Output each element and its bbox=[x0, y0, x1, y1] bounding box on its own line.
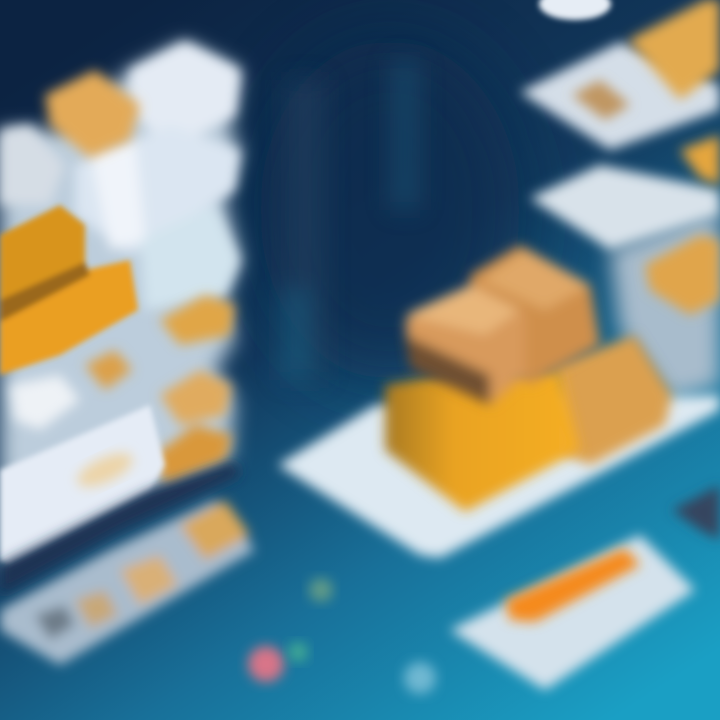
top orange box bbox=[45, 70, 140, 158]
second shelf bbox=[530, 165, 720, 250]
shelf backing bbox=[0, 42, 240, 565]
top white oval bbox=[539, 0, 611, 20]
middle shelf items bbox=[10, 295, 235, 485]
right upper shelves bbox=[520, 0, 720, 315]
left shelf stack bbox=[0, 42, 255, 665]
third orange box bbox=[645, 235, 720, 315]
card base bbox=[450, 535, 695, 690]
dark glow behind center bbox=[260, 40, 520, 380]
white card with orange button bbox=[450, 535, 695, 690]
large white panel bbox=[0, 405, 165, 565]
upper white shelf boxes bbox=[0, 42, 240, 310]
bottom shelf tray bbox=[0, 500, 255, 665]
orange button bbox=[505, 548, 640, 622]
central dark data columns bbox=[280, 60, 420, 380]
top large orange box bbox=[628, 0, 720, 100]
pink dot bbox=[248, 646, 284, 682]
upper tan boxes bbox=[405, 245, 600, 405]
colored dots bbox=[248, 578, 436, 694]
lower yellow box bbox=[385, 370, 580, 512]
central box pile bbox=[385, 245, 672, 512]
central platform bbox=[278, 395, 720, 558]
top shelf bbox=[520, 42, 720, 150]
green dot bbox=[288, 642, 308, 662]
panel orange label bbox=[73, 446, 137, 494]
pale dot bbox=[404, 662, 436, 694]
small shelf box bbox=[572, 80, 630, 120]
right column backing bbox=[610, 210, 720, 400]
olive dot bbox=[309, 578, 333, 602]
small right orange box bbox=[680, 135, 720, 185]
right tan boxes bbox=[555, 335, 672, 465]
large orange boxes bbox=[0, 205, 138, 375]
dark shelf gap bbox=[0, 462, 240, 595]
dark device at right edge bbox=[672, 485, 720, 540]
